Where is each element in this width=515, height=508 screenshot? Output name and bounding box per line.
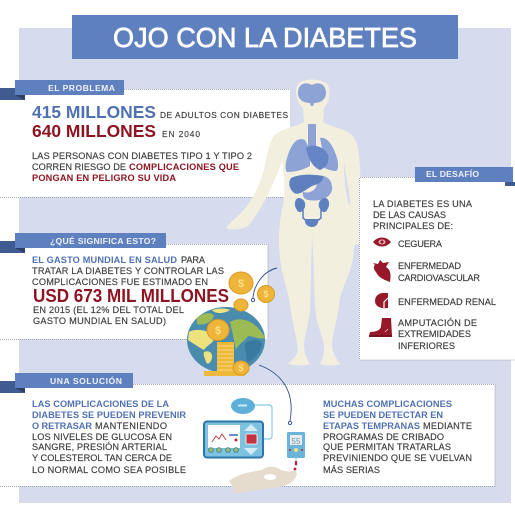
ribbon tag: el desafio: [415, 167, 515, 186]
text: riesgo de complicaciones: [32, 151, 252, 183]
organ: stomach: [303, 176, 332, 201]
text: deteccion temprana: SE PUEDEN DETECTAR EN: [323, 410, 443, 420]
statistic: 640 millones: 640 MILLONES: [32, 121, 156, 141]
text: gasto mundial: TRATAR LA DIABETES Y CONTROLAR LAS: [32, 266, 224, 276]
label: enfermedad cardiovascular: [398, 261, 480, 283]
text: riesgo de complicaciones: PONGAN EN PELIGRO SU VIDA: [32, 173, 176, 183]
text: deteccion temprana: PREVINIENDO QUE SE VUELVAN: [323, 453, 472, 463]
ribbon tag: el desafio: EL DESAFÍO: [426, 169, 479, 179]
icon: glucose meter: 55: [292, 437, 301, 446]
text: gasto mundial: USD 673 MIL MILLONES: [33, 285, 229, 306]
text: prevenir o retrasar: O RETRASAR: [32, 421, 92, 431]
icon: eye: [373, 238, 391, 246]
text: gasto mundial: [32, 255, 229, 326]
organ: trachea: [308, 124, 316, 148]
panel: que significa esto: [0, 233, 268, 340]
icon: globe with coins: [187, 272, 274, 376]
arrow: globe to glucose meter: [259, 365, 292, 425]
text: deteccion temprana: MEDIANTE: [423, 421, 472, 431]
text: riesgo de complicaciones: LAS PERSONAS CON DIABETES TIPO 1 Y TIPO 2: [32, 151, 252, 161]
label: amputacion: AMPUTACIÓN DE: [398, 318, 477, 328]
ribbon tag: que significa esto: [0, 233, 166, 253]
ribbon tag: una solucion: UNA SOLUCIÓN: [50, 375, 122, 386]
text: gasto mundial: EN 2015 (EL 12% DEL TOTAL DEL: [33, 305, 184, 315]
organ: heart: [306, 146, 328, 170]
text: prevenir o retrasar: SANGRE, PRESIÓN ARTERIAL: [32, 442, 167, 452]
dollar signs: $: [263, 289, 269, 299]
ribbon tag: el problema: EL PROBLEMA: [48, 83, 115, 93]
statistic: 415 millones: [32, 102, 288, 122]
dollar signs: $: [238, 278, 244, 290]
text: prevenir o retrasar: Y COLESTEROL TAN CERCA DE: [32, 453, 172, 463]
ribbon tag: una solucion: [0, 373, 133, 393]
icon: foot: [369, 318, 392, 337]
text: prevenir o retrasar: LAS COMPLICACIONES DE LA: [32, 399, 169, 409]
text: deteccion temprana: MÁS SERIAS: [323, 465, 380, 475]
panel: una solucion: [0, 373, 495, 486]
text: deteccion temprana: QUE PERMITAN TRATARLAS: [323, 442, 451, 452]
organ: lungs: [286, 138, 338, 172]
text: deteccion temprana: ETAPAS TEMPRANAS: [323, 421, 420, 431]
text: causas principales: [373, 199, 473, 231]
dollar signs: [215, 278, 269, 373]
label: amputacion: EXTREMIDADES: [398, 329, 471, 339]
text: prevenir o retrasar: MANTENIENDO: [95, 421, 167, 431]
text: deteccion temprana: [323, 399, 472, 475]
icon: glucose meter: [287, 432, 305, 466]
text: riesgo de complicaciones: CORREN RIESGO DE: [32, 162, 126, 172]
panel: el desafio: [359, 167, 515, 360]
icon: glucose monitor with sensor: [204, 398, 272, 458]
dollar signs: $: [238, 363, 244, 373]
statistic: 640 millones: EN 2040: [162, 129, 200, 139]
icon: kidney: [375, 293, 388, 308]
coins: [207, 272, 274, 375]
arrow: heart to coins: [251, 268, 277, 302]
text: riesgo de complicaciones: COMPLICACIONES QUE: [129, 162, 239, 172]
label: ceguera: CEGUERA: [398, 239, 443, 249]
dollar signs: $: [215, 325, 221, 337]
text: causas principales: PRINCIPALES DE:: [373, 221, 453, 231]
text: deteccion temprana: MUCHAS COMPLICACIONES: [323, 399, 452, 409]
organ: brain: [298, 83, 326, 106]
text: gasto mundial: EL GASTO MUNDIAL EN SALUD: [32, 255, 177, 265]
text: gasto mundial: GASTO MUNDIAL EN SALUD): [33, 316, 166, 326]
icon: heart: [373, 260, 391, 282]
ribbon tag: el problema: [0, 80, 124, 100]
label: amputacion: [398, 318, 477, 351]
text: prevenir o retrasar: [32, 399, 186, 475]
label: enfermedad cardiovascular: CARDIOVASCULAR: [398, 273, 480, 283]
text: gasto mundial: PARA: [181, 255, 206, 265]
text: deteccion temprana: PROGRAMAS DE CRIBADO: [323, 432, 444, 442]
label: amputacion: INFERIORES: [398, 341, 455, 351]
panel: el problema: [0, 80, 290, 198]
text: gasto mundial: COMPLICACIONES FUE ESTIMADO EN: [32, 277, 208, 287]
organ: liver: [289, 175, 323, 194]
label: enfermedad renal: ENFERMEDAD RENAL: [398, 297, 496, 307]
text: prevenir o retrasar: LOS NIVELES DE GLUCOSA EN: [32, 432, 172, 442]
coin stack: [204, 342, 245, 376]
label: enfermedad cardiovascular: ENFERMEDAD: [398, 261, 461, 271]
statistic: 415 millones: 415 MILLONES: [32, 102, 156, 122]
text: prevenir o retrasar: LO NORMAL COMO SEA POSIBLE: [32, 465, 186, 475]
organ: kidneys and bladder: [295, 198, 329, 227]
statistic: 415 millones: DE ADULTOS CON DIABETES: [160, 110, 288, 120]
ribbon tag: que significa esto: ¿QUÉ SIGNIFICA ESTO?: [50, 236, 156, 246]
title banner: [72, 15, 458, 59]
continents: [188, 308, 265, 364]
text: causas principales: LA DIABETES ES UNA: [373, 199, 473, 209]
icon: hand with blood drop: [229, 467, 297, 494]
text: causas principales: DE LAS CAUSAS: [373, 210, 446, 220]
human body figure: [226, 80, 366, 366]
title banner: OJO CON LA DIABETES: [113, 22, 417, 53]
text: prevenir o retrasar: DIABETES SE PUEDEN PREVENIR: [32, 410, 186, 420]
